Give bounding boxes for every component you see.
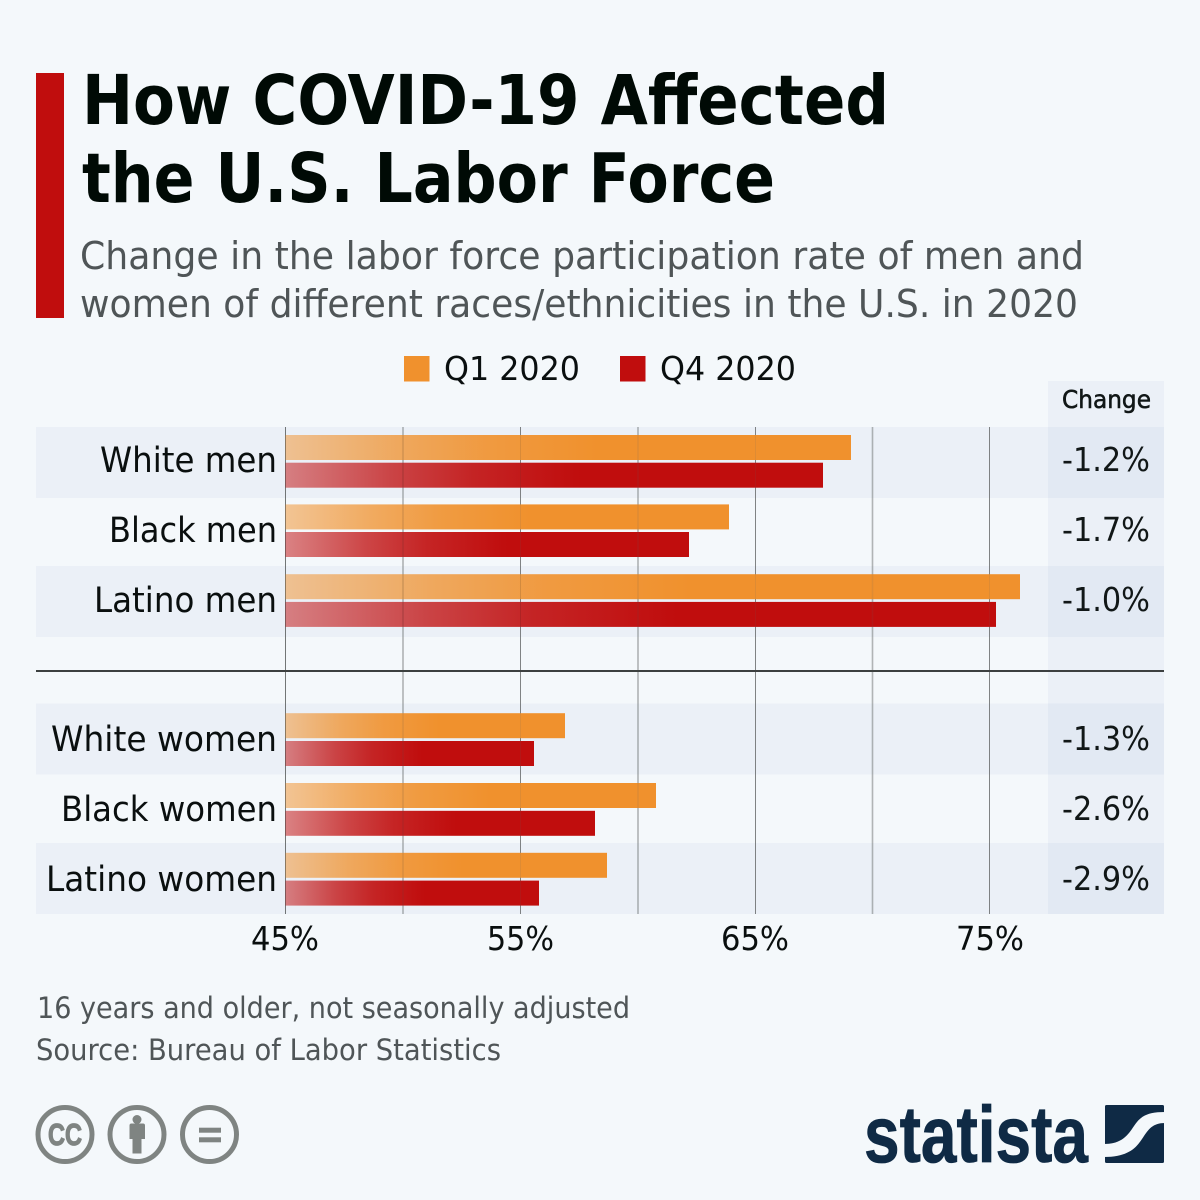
row labels: Black women: [61, 790, 277, 830]
row labels: Latino men: [94, 581, 277, 621]
bars: Black men: [285, 504, 729, 557]
footnote and source: [36, 991, 630, 1067]
subtitle: women of different races/ethnicities in the U.S. in 2020: [80, 282, 1078, 326]
statista logo: statista: [864, 1090, 1088, 1179]
legend item: Q1 2020: Q1 2020: [444, 349, 580, 388]
row backgrounds: [36, 427, 1164, 914]
legend item: Q4 2020: Q4 2020: [660, 349, 796, 388]
x axis labels: [251, 920, 1024, 958]
change values: -2.6%: [1062, 790, 1150, 828]
title: How COVID-19 Affected: [82, 61, 889, 141]
subtitle: Change in the labor force participation rate of men and: [80, 234, 1084, 278]
change values: [1062, 441, 1150, 898]
row labels: [46, 441, 277, 900]
x axis labels: 45%: [251, 920, 319, 958]
icon: no derivatives: [182, 1108, 236, 1162]
row labels: Black men: [109, 511, 277, 551]
x axis labels: 65%: [721, 920, 789, 958]
change values: -1.7%: [1062, 511, 1150, 549]
x axis labels: 55%: [487, 920, 554, 958]
change values: -2.9%: [1062, 860, 1150, 898]
change values: -1.2%: [1062, 441, 1150, 479]
change column: Change: [1062, 385, 1151, 414]
change column: [1048, 381, 1164, 914]
row labels: Latino women: [46, 860, 277, 900]
bars: Latino women: [285, 853, 607, 906]
icon: creative commons: [38, 1108, 92, 1162]
icon: creative commons: CC: [48, 1117, 82, 1152]
row labels: White women: [51, 720, 277, 760]
bars: Latino men: [285, 574, 1020, 627]
change values: -1.3%: [1062, 720, 1150, 758]
row labels: White men: [100, 441, 277, 481]
bars: White women: [285, 713, 565, 766]
change values: -1.0%: [1062, 581, 1150, 619]
bars: Black women: [285, 783, 656, 836]
x axis labels: 75%: [956, 920, 1024, 958]
footnote and source: 16 years and older, not seasonally adjusted: [37, 991, 630, 1025]
footnote and source: Source: Bureau of Labor Statistics: [36, 1033, 501, 1067]
title: [82, 61, 889, 219]
title: the U.S. Labor Force: [82, 139, 775, 219]
subtitle: [80, 234, 1084, 326]
legend: [404, 349, 796, 388]
chart: [36, 381, 1164, 958]
accent bar: [36, 73, 64, 318]
bars: White men: [285, 435, 851, 488]
icon: attribution: [110, 1108, 164, 1162]
